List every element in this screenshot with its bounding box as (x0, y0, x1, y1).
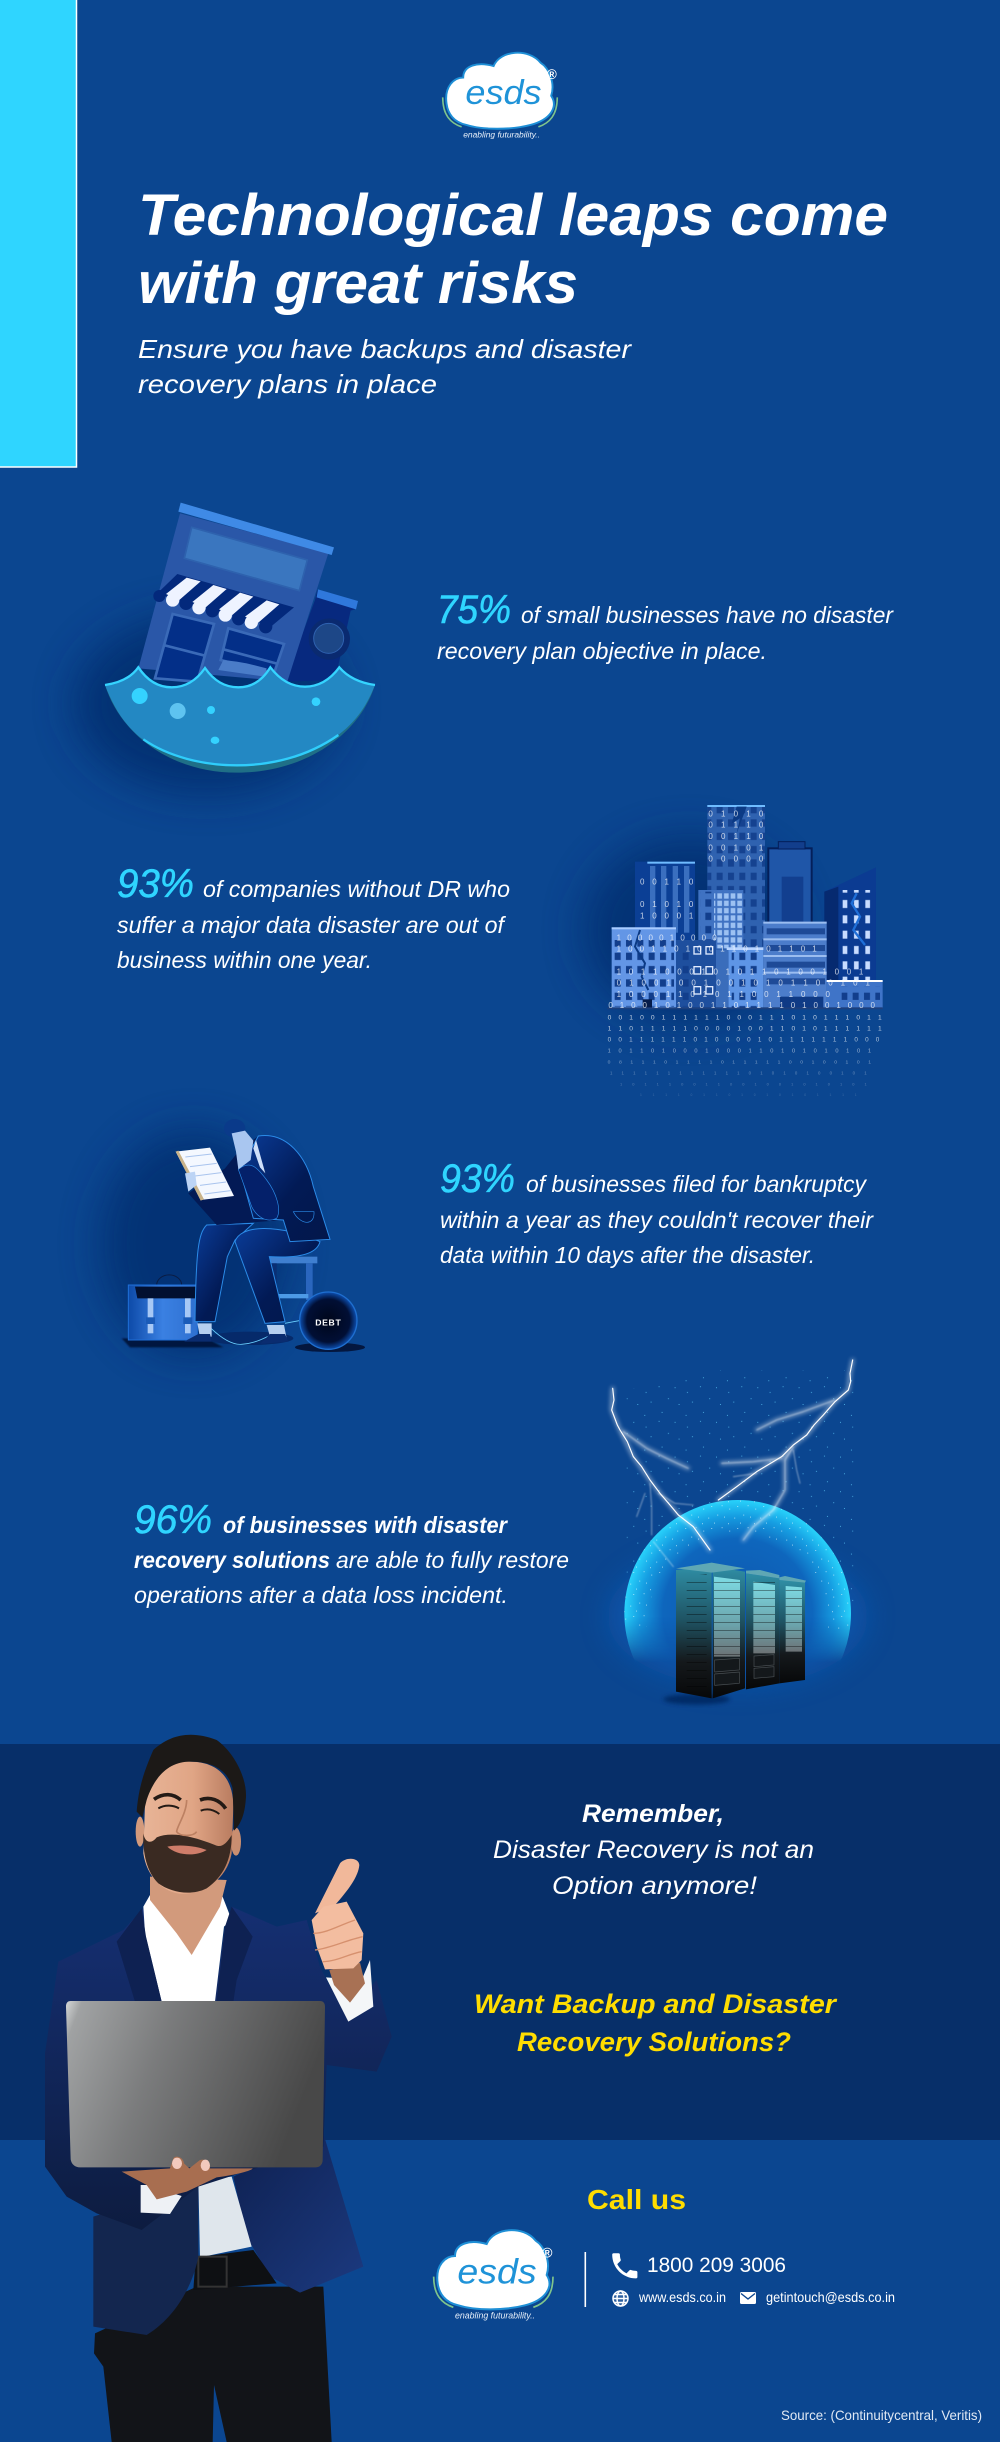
website: www.esds.co.in (638, 2289, 726, 2305)
logo cloud (446, 53, 554, 129)
binary digits fading below city: 1 1 1 1 0 1 1 0 1 0 1 0 1 0 1 1 1 1 (640, 1093, 857, 1097)
source note: Source: (Continuitycentral, Veritis) (781, 2407, 982, 2423)
binary digits over buildings: 0 1 0 1 0 (708, 810, 764, 819)
stat 1: of small businesses have no disaster (521, 602, 894, 628)
call us heading: Call us (587, 2184, 686, 2215)
binary digits over buildings: 0 1 0 0 1 0 0 1 0 0 1 0 1 0 1 1 0 0 1 0 1 (617, 979, 871, 988)
logo wordmark: esds (465, 74, 542, 112)
icon: phone (612, 2253, 637, 2278)
stat 4: 96% (134, 1498, 212, 1542)
logo tagline: enabling futurability.. (455, 2310, 535, 2320)
phone number: 1800 209 3006 (647, 2254, 786, 2277)
icon: mail (740, 2292, 756, 2304)
cuff lower (141, 2185, 182, 2214)
logo hands (434, 2277, 553, 2307)
front building (728, 948, 763, 1008)
eyes and brows (154, 1795, 226, 1814)
call to action question (474, 1989, 838, 2057)
briefcase (128, 1275, 197, 1340)
illustration: city of data (583, 805, 883, 1097)
illustration: businessman in debt (100, 1119, 365, 1357)
contact divider (584, 2252, 586, 2307)
particles (627, 1370, 853, 1630)
logo registered mark: ® (547, 67, 557, 82)
stat 1: recovery plan objective in place. (437, 638, 767, 664)
hair (137, 1735, 246, 1831)
dark building (768, 848, 812, 923)
subtitle (138, 334, 632, 399)
lapels (117, 1908, 162, 2002)
stat 3: data within 10 days after the disaster. (440, 1242, 815, 1268)
stat 2: of companies without DR who (203, 876, 510, 902)
title: with great risks (138, 251, 578, 316)
slanted building (824, 867, 876, 982)
accent bar (0, 0, 76, 467)
reminder text: Option anymore! (552, 1872, 757, 1900)
title (138, 183, 888, 316)
logo tagline: enabling futurability.. (463, 129, 540, 139)
shop windows (155, 614, 214, 682)
binary digits fading below city: 1 1 1 1 1 1 1 1 1 1 1 1 0 1 0 1 0 1 0 0 1 0 1 (610, 1071, 867, 1076)
binary digits over buildings (608, 810, 876, 1010)
binary digits over buildings: 0 1 1 1 0 (708, 821, 764, 830)
binary digits over buildings: 0 0 1 1 0 (640, 877, 694, 886)
side building (285, 590, 357, 682)
lightning bolts (612, 1360, 853, 1567)
low right building (827, 981, 883, 1008)
shop building (138, 513, 328, 682)
thumbs up hand (312, 1859, 363, 1969)
stat 4: are able to fully restore (336, 1547, 569, 1573)
illustration: flooded shop (73, 503, 375, 793)
wide building (763, 922, 827, 1008)
logo: esds bottom (434, 2230, 553, 2320)
ears (136, 1817, 144, 1847)
stat 3 (440, 1157, 874, 1268)
dome glow (608, 1547, 868, 1687)
energy dome (624, 1500, 851, 1660)
binary digits over buildings: 0 1 0 1 0 (640, 900, 694, 909)
laptop (66, 2001, 325, 2167)
stat 4: of businesses with disaster (223, 1512, 508, 1538)
water (105, 667, 375, 773)
binary digits fading below city: 1 0 1 1 1 0 0 1 1 0 0 1 0 0 1 0 1 0 1 0 1 (620, 1082, 867, 1087)
supporting hand (122, 2157, 253, 2199)
water bubbles (132, 688, 320, 744)
neck (150, 1877, 227, 1955)
lips (167, 1845, 207, 1854)
stat 2 (117, 862, 510, 973)
binary digits fading below city: 0 8 1 1 1 0 1 1 1 1 0 1 1 1 1 1 0 0 1 0 0 1 0 1 (608, 1060, 871, 1066)
belt (193, 2250, 277, 2290)
stat 3: 93% (440, 1157, 515, 1201)
stat 3: of businesses filed for bankruptcy (526, 1171, 867, 1197)
logo hands (443, 97, 557, 127)
title: Technological leaps come (138, 183, 888, 248)
binary digits over buildings: 1 0 0 0 1 (640, 911, 694, 920)
chain (211, 1321, 299, 1344)
debt ball (300, 1292, 357, 1349)
front dark building (676, 940, 716, 1008)
binary digits over buildings: 0 0 1 1 0 (708, 832, 764, 841)
chair (270, 1257, 317, 1300)
icon: globe (613, 2291, 628, 2306)
dark band (0, 1744, 1000, 2140)
torso and arm (188, 1136, 330, 1242)
jacket right panel (233, 2133, 363, 2293)
debtor shadow (100, 1130, 287, 1357)
stat 1: 75% (437, 588, 511, 632)
binary digits over buildings: 1 0 0 1 1 0 1 0 0 1 1 0 1 0 1 1 0 1 (617, 945, 817, 954)
stat 4: recovery solutions (134, 1547, 330, 1573)
binary digits over buildings: 0 1 0 0 1 0 1 0 0 1 1 0 1 1 1 1 0 1 0 0 1 0 0 0 (608, 1001, 876, 1010)
stat 2: business within one year. (117, 947, 372, 973)
stat 4: operations after a data loss incident. (134, 1582, 508, 1608)
binary digits fading below city: 1 1 0 1 1 1 1 1 0 0 0 0 1 0 0 1 1 0 1 0 1 1 1 1 1 1 (608, 1026, 882, 1033)
stat 2: suffer a major data disaster are out of (117, 912, 507, 938)
shop shadow (73, 613, 340, 793)
reminder text: Disaster Recovery is not an (493, 1836, 814, 1864)
shirt lower (198, 2177, 252, 2257)
binary digits over buildings: 0 0 1 0 1 (708, 843, 764, 852)
photo: man with laptop and thumbs up (45, 1735, 392, 2442)
illustration: server under lightning (608, 1360, 868, 1727)
binary digits fading below city: 0 0 1 0 0 1 1 1 1 1 1 0 0 0 1 1 1 0 1 0 1 1 1 0 1 1 (608, 1014, 882, 1021)
shirt cuff and wrist (326, 1960, 373, 2022)
binary digits over buildings: 1 0 0 0 1 1 0 1 0 1 1 0 0 1 1 0 0 0 (617, 990, 831, 999)
tower (707, 805, 765, 952)
city shadow (583, 837, 797, 1023)
cracked left building (612, 927, 676, 1008)
beard (143, 1833, 232, 1893)
jacket left panel (93, 2183, 198, 2335)
logo wordmark: esds (457, 2252, 537, 2291)
stat 3: within a year as they couldn't recover their (440, 1207, 874, 1233)
jacket upper body (45, 1907, 392, 2230)
binary digits fading below city: 1 0 1 1 0 1 0 0 0 1 0 0 0 1 1 0 1 0 1 0 1 0 1 0 1 (608, 1049, 871, 1055)
stat 1 (437, 588, 894, 664)
trousers (94, 2287, 332, 2442)
awning (157, 574, 294, 626)
logo registered mark: ® (542, 2245, 553, 2261)
stat 2: 93% (117, 862, 194, 906)
legs and shoes (184, 1223, 320, 1344)
head and hand (224, 1119, 265, 1173)
server racks (663, 1563, 806, 1705)
call to action question: Want Backup and Disaster (474, 1989, 838, 2019)
logo cloud (437, 2230, 549, 2309)
reminder text (493, 1800, 814, 1900)
logo: esds top (443, 53, 557, 139)
document (176, 1148, 234, 1201)
call to action question: Recovery Solutions? (517, 2027, 791, 2057)
debt ball: DEBT (315, 1318, 341, 1328)
binary digits over buildings: 1 0 1 1 0 0 0 1 0 1 0 1 1 0 1 0 0 1 0 0 1 (617, 967, 864, 976)
subtitle: recovery plans in place (138, 369, 437, 399)
binary digits over buildings: 1 0 0 0 0 1 0 0 0 0 (617, 934, 717, 943)
face (143, 1762, 233, 1894)
binary digits fading below city: 0 0 1 1 1 1 1 1 0 1 0 0 0 0 1 0 1 1 1 1 1 1 1 0 0 0 (608, 1037, 880, 1044)
floor shadows (122, 1338, 223, 1347)
mid building (698, 890, 743, 948)
subtitle: Ensure you have backups and disaster (138, 334, 632, 364)
left tall building (635, 862, 695, 942)
binary digits over buildings: 0 0 0 0 0 (708, 855, 764, 864)
binary digits fading below city (608, 1014, 882, 1097)
stat 4 (134, 1498, 569, 1608)
nose shading (177, 1800, 197, 1835)
reminder text: Remember, (582, 1800, 724, 1828)
shirt (143, 1890, 232, 2002)
email: getintouch@esds.co.in (766, 2289, 895, 2305)
